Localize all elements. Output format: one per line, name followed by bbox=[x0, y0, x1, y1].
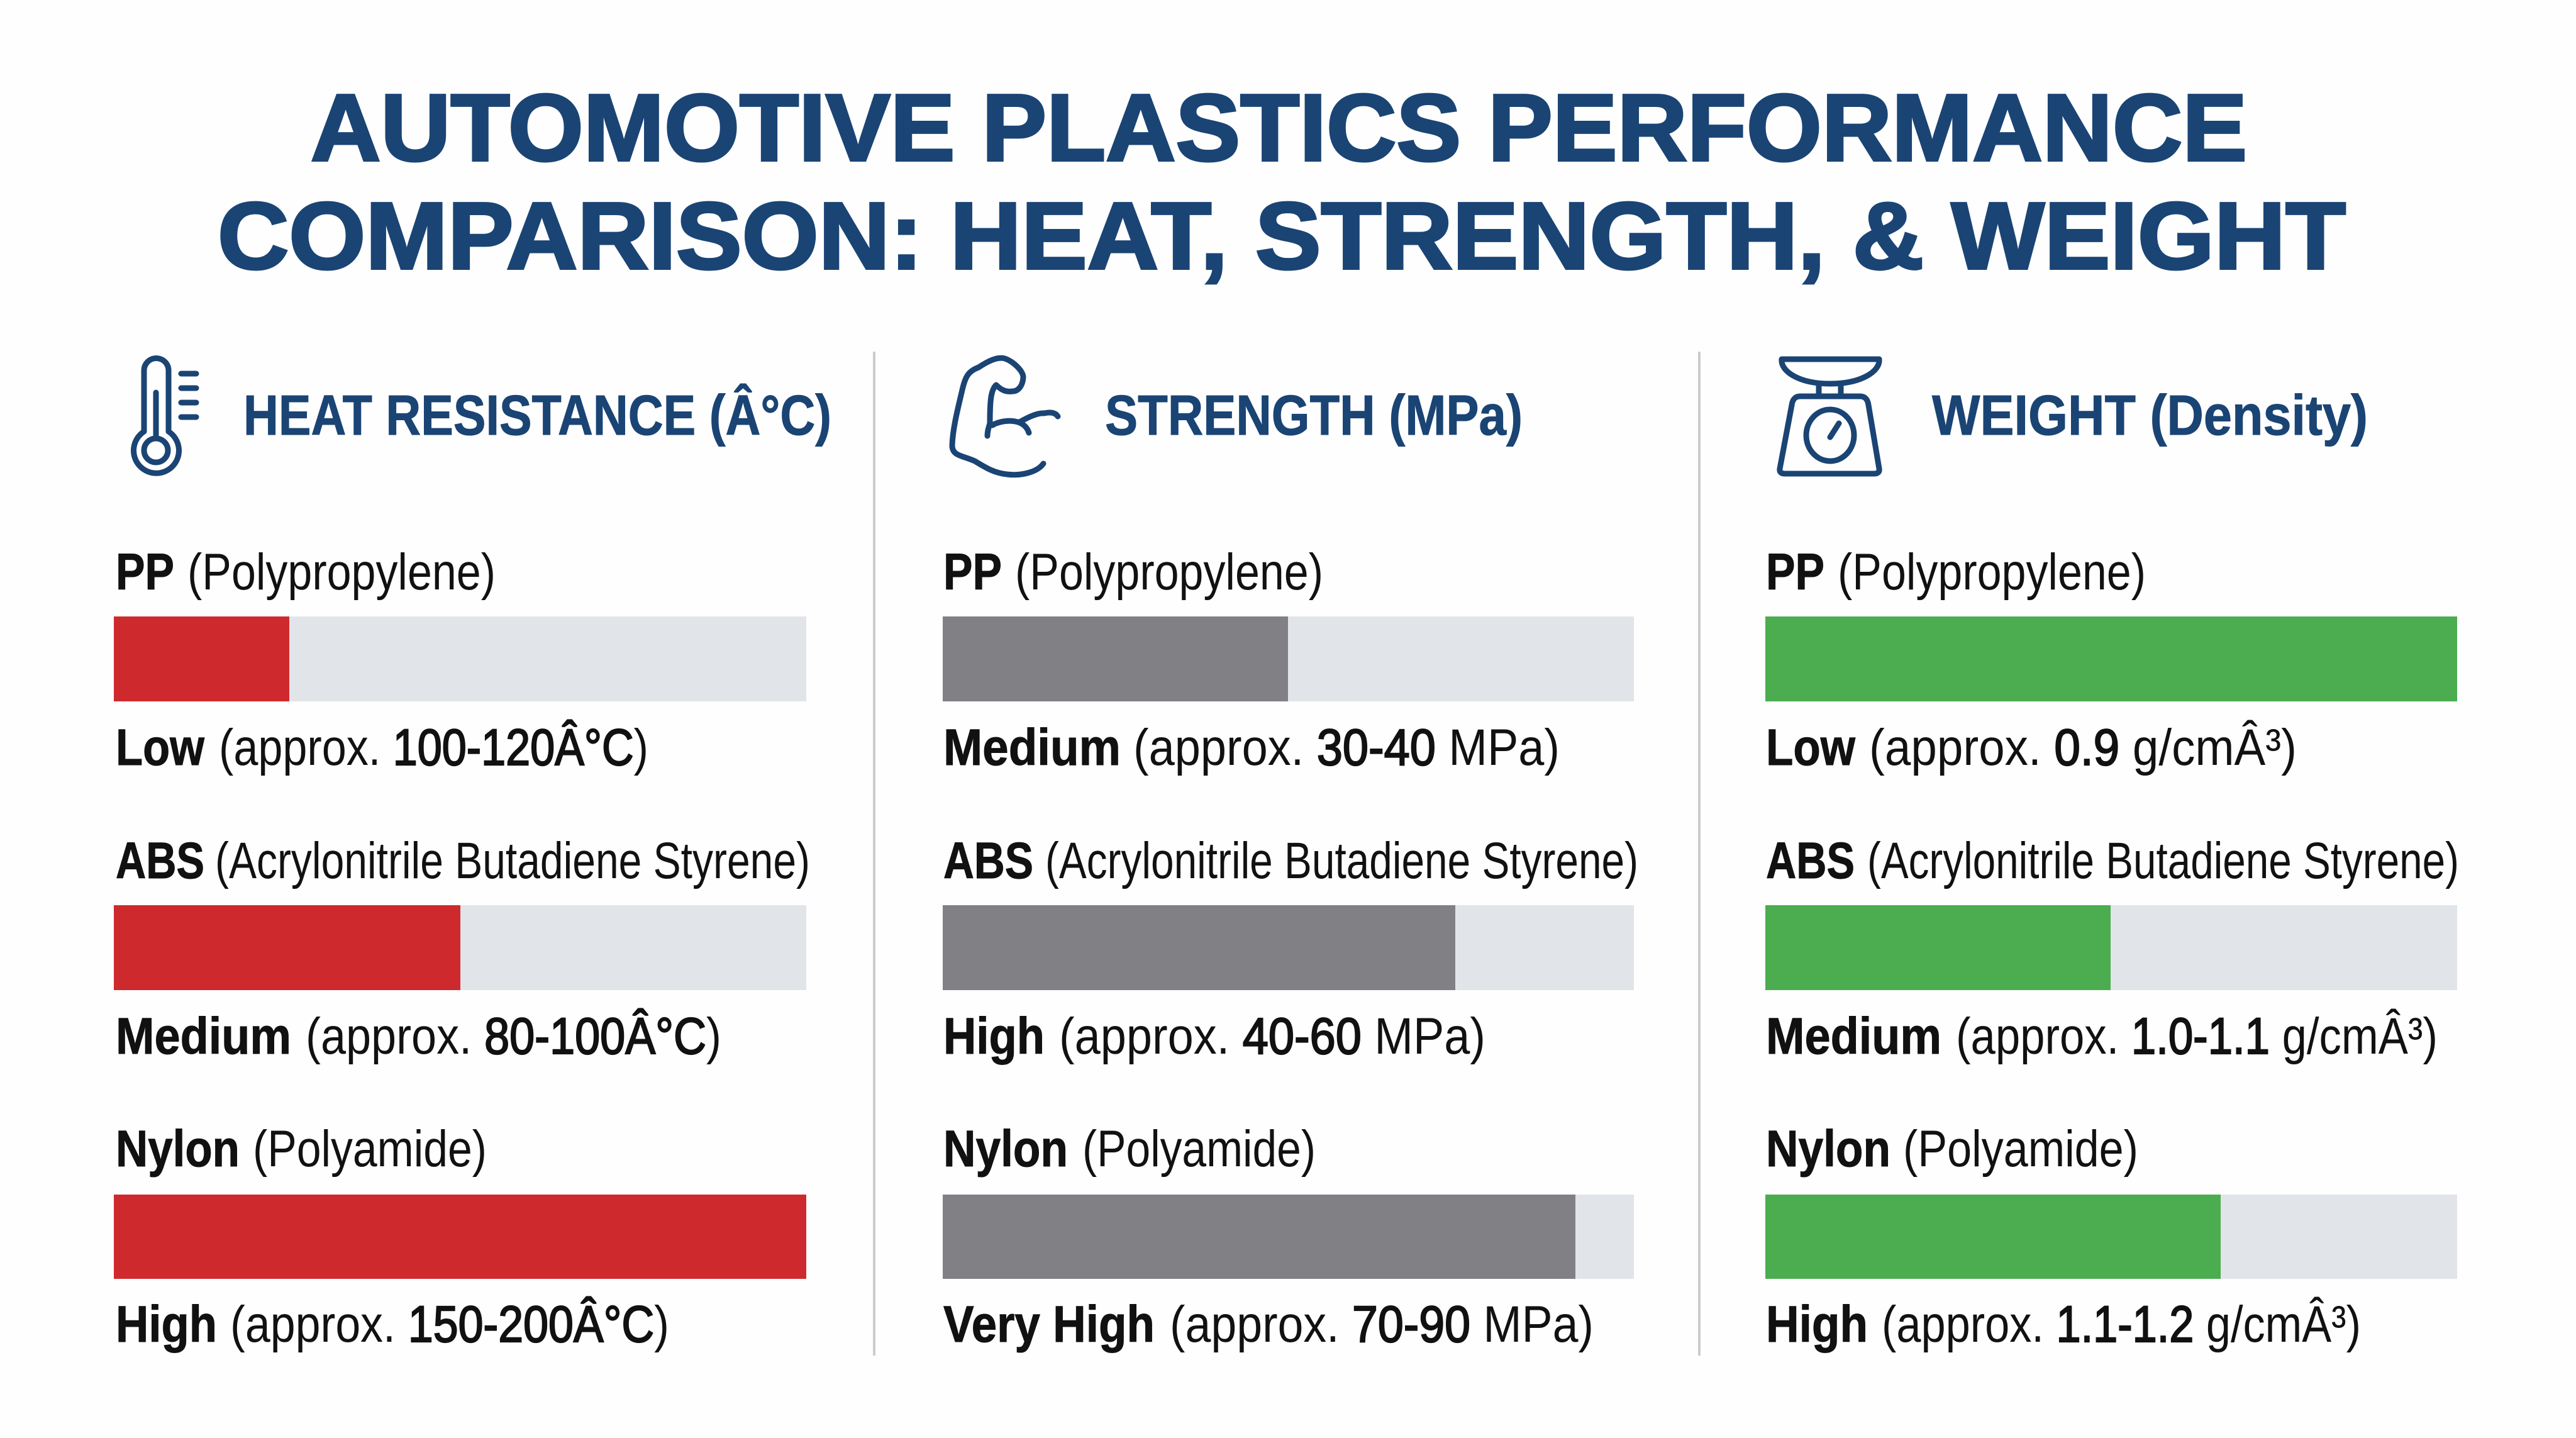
row: PP strength: (approx. 30-40 MPa) bbox=[1133, 719, 1560, 776]
row: ABS heat: (Acrylonitrile Butadiene Styrene) bbox=[215, 832, 810, 889]
title: AUTOMOTIVE PLASTICS PERFORMANCE bbox=[311, 74, 2247, 181]
title bbox=[218, 74, 2346, 289]
row: ABS weight bbox=[1765, 832, 2459, 1065]
row: PP strength: PP bbox=[943, 543, 1002, 601]
heading: strength: STRENGTH (MPa) bbox=[1105, 384, 1523, 447]
row: PP heat: PP bbox=[116, 543, 174, 601]
heading: heat resistance: HEAT RESISTANCE (Â°C) bbox=[243, 383, 831, 447]
row: ABS strength: (approx. 40-60 MPa) bbox=[1059, 1008, 1485, 1065]
row: Nylon strength bbox=[943, 1120, 1634, 1353]
row: PP heat: (Polypropylene) bbox=[187, 543, 496, 601]
row: Nylon heat: Nylon bbox=[116, 1120, 240, 1178]
row: Nylon weight: Nylon bbox=[1766, 1120, 1890, 1178]
row: ABS strength bbox=[943, 832, 1638, 1065]
title: COMPARISON: HEAT, STRENGTH, & WEIGHT bbox=[218, 182, 2346, 289]
icon: flexed bicep bbox=[952, 358, 1058, 475]
row: Nylon heat bbox=[114, 1120, 806, 1353]
row: PP strength: (Polypropylene) bbox=[1015, 543, 1323, 601]
icon: thermometer bbox=[134, 359, 196, 473]
row: ABS heat: Medium bbox=[116, 1008, 291, 1065]
row: Nylon weight: (approx. 1.1-1.2 g/cmÂ³) bbox=[1882, 1296, 2361, 1353]
row: PP weight: Low bbox=[1766, 719, 1855, 776]
row: ABS weight: Medium bbox=[1766, 1008, 1941, 1065]
row: ABS strength: ABS bbox=[943, 832, 1033, 889]
row: PP heat: (approx. 100-120Â°C) bbox=[219, 719, 648, 776]
heading: weight: WEIGHT (Density) bbox=[1932, 384, 2368, 447]
panel: weight bbox=[1765, 359, 2459, 1353]
row: ABS strength: High bbox=[943, 1008, 1045, 1065]
row: Nylon strength: Very High bbox=[943, 1296, 1155, 1353]
row: Nylon strength: (Polyamide) bbox=[1082, 1120, 1316, 1178]
row: Nylon weight bbox=[1765, 1120, 2457, 1353]
row: ABS weight: ABS bbox=[1766, 832, 1855, 889]
row: Nylon heat: High bbox=[116, 1296, 217, 1353]
row: PP weight bbox=[1765, 543, 2457, 776]
row: PP heat bbox=[114, 543, 806, 776]
row: Nylon strength: (approx. 70-90 MPa) bbox=[1170, 1296, 1594, 1353]
panel: strength bbox=[943, 358, 1638, 1353]
row: PP strength bbox=[943, 543, 1634, 776]
row: PP weight: (approx. 0.9 g/cmÂ³) bbox=[1869, 719, 2297, 776]
row: Nylon strength: Nylon bbox=[943, 1120, 1068, 1178]
row: Nylon heat: (approx. 150-200Â°C) bbox=[230, 1296, 669, 1353]
row: ABS strength: (Acrylonitrile Butadiene Styrene) bbox=[1045, 832, 1638, 889]
panel: heat resistance bbox=[114, 359, 831, 1353]
row: PP strength: Medium bbox=[943, 719, 1121, 776]
icon: kitchen scale bbox=[1780, 359, 1879, 474]
row: PP weight: (Polypropylene) bbox=[1838, 543, 2146, 601]
row: ABS heat: ABS bbox=[116, 832, 204, 889]
row: ABS heat bbox=[114, 832, 810, 1065]
row: Nylon weight: High bbox=[1766, 1296, 1868, 1353]
row: PP heat: Low bbox=[116, 719, 204, 776]
row: PP weight: PP bbox=[1766, 543, 1824, 601]
row: Nylon heat: (Polyamide) bbox=[253, 1120, 487, 1178]
row: ABS weight: (approx. 1.0-1.1 g/cmÂ³) bbox=[1956, 1008, 2438, 1065]
row: ABS heat: (approx. 80-100Â°C) bbox=[306, 1008, 721, 1065]
row: Nylon weight: (Polyamide) bbox=[1903, 1120, 2138, 1178]
